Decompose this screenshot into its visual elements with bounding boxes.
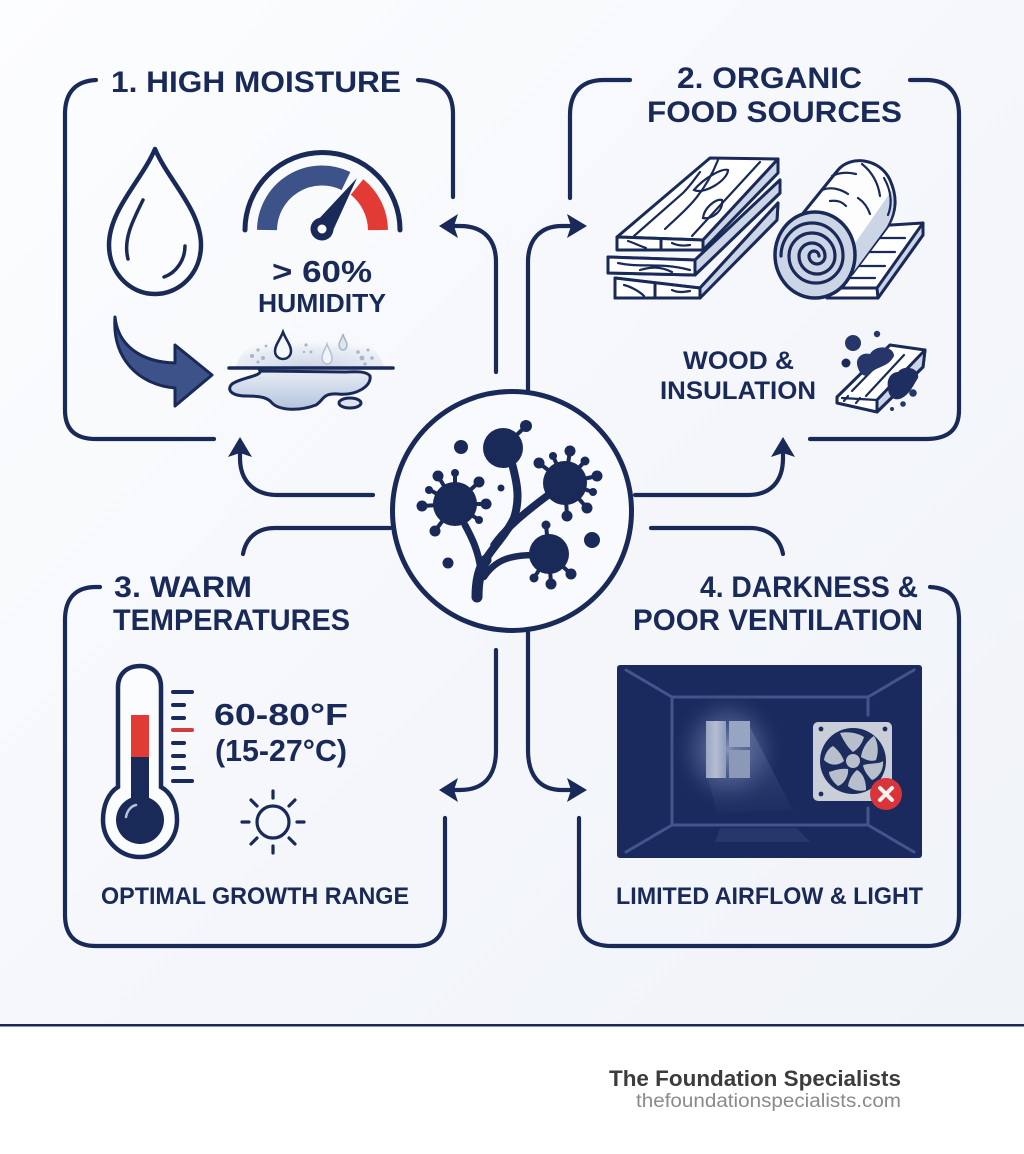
heading: 3. Warm Temperatures: TEMPERATURES [113, 604, 350, 637]
panel 1 frame [65, 80, 453, 439]
icon: sun [242, 791, 304, 853]
heading: 4. Darkness & Poor Ventilation: POOR VENTILATION [633, 604, 923, 637]
footer [0, 1024, 1024, 1154]
heading: 2. Organic Food Sources: 2. ORGANIC [677, 62, 862, 95]
connector: to temperature panel [243, 528, 390, 554]
heading: 1. High Moisture: 1. HIGH MOISTURE [111, 66, 401, 99]
icon: water drop [109, 149, 201, 294]
footer brand name: The Foundation Specialists [609, 1066, 901, 1091]
panel: 3. warm temperatures [65, 571, 445, 946]
heading: 4. Darkness & Poor Ventilation [633, 571, 923, 637]
label: wood & insulation: WOOD & [683, 347, 794, 375]
caption: optimal growth range: OPTIMAL GROWTH RANGE [101, 883, 409, 910]
arrow: to temperature [439, 650, 496, 802]
heading: 4. Darkness & Poor Ventilation: 4. DARKNESS & [700, 571, 918, 604]
arrow: to ventilation [528, 632, 587, 802]
icon: curved arrow [115, 317, 212, 406]
icon: thermometer [103, 666, 192, 857]
temperature range: (15-27°C) [215, 733, 347, 768]
panel 4 frame [579, 587, 959, 946]
temperature range: 60-80°F [214, 697, 348, 732]
icon: red x badge [870, 778, 902, 810]
illustration: dark room with blocked fan [617, 665, 922, 858]
icon: humidity gauge [245, 153, 400, 240]
caption: limited airflow & light: LIMITED AIRFLOW & LIGHT [616, 883, 923, 910]
connector: to ventilation panel [651, 528, 783, 554]
panel: 2. organic food sources [570, 62, 959, 439]
panel 2 frame [570, 80, 959, 439]
icon: fan [813, 722, 892, 801]
stat: > 60%: > 60% [272, 254, 372, 289]
icon: moldy wood [837, 331, 925, 412]
panel 3 frame [65, 587, 445, 946]
arrow: to moisture [439, 214, 496, 372]
icon: stacked wood planks [608, 158, 780, 298]
arrow: up to food panel [635, 437, 795, 495]
temperature range [214, 697, 348, 768]
heading: 3. Warm Temperatures [113, 571, 350, 637]
heading: 3. Warm Temperatures: 3. WARM [114, 571, 252, 604]
arrow: to food sources [528, 214, 587, 392]
panel: 1. high moisture [65, 66, 453, 439]
label: wood & insulation: INSULATION [660, 377, 816, 405]
icon: water puddle [229, 330, 393, 409]
heading: 2. Organic Food Sources [647, 62, 902, 129]
label: humidity: HUMIDITY [258, 288, 386, 318]
footer url: thefoundationspecialists.com [636, 1091, 901, 1112]
label: wood & insulation [660, 347, 816, 405]
panel: 4. darkness and poor ventilation [579, 571, 959, 946]
connector arrows [228, 214, 795, 802]
central mold icon [392, 392, 632, 630]
icon: insulation roll [775, 161, 923, 298]
arrow: up to moisture panel [228, 437, 373, 495]
heading: 2. Organic Food Sources: FOOD SOURCES [647, 96, 902, 129]
